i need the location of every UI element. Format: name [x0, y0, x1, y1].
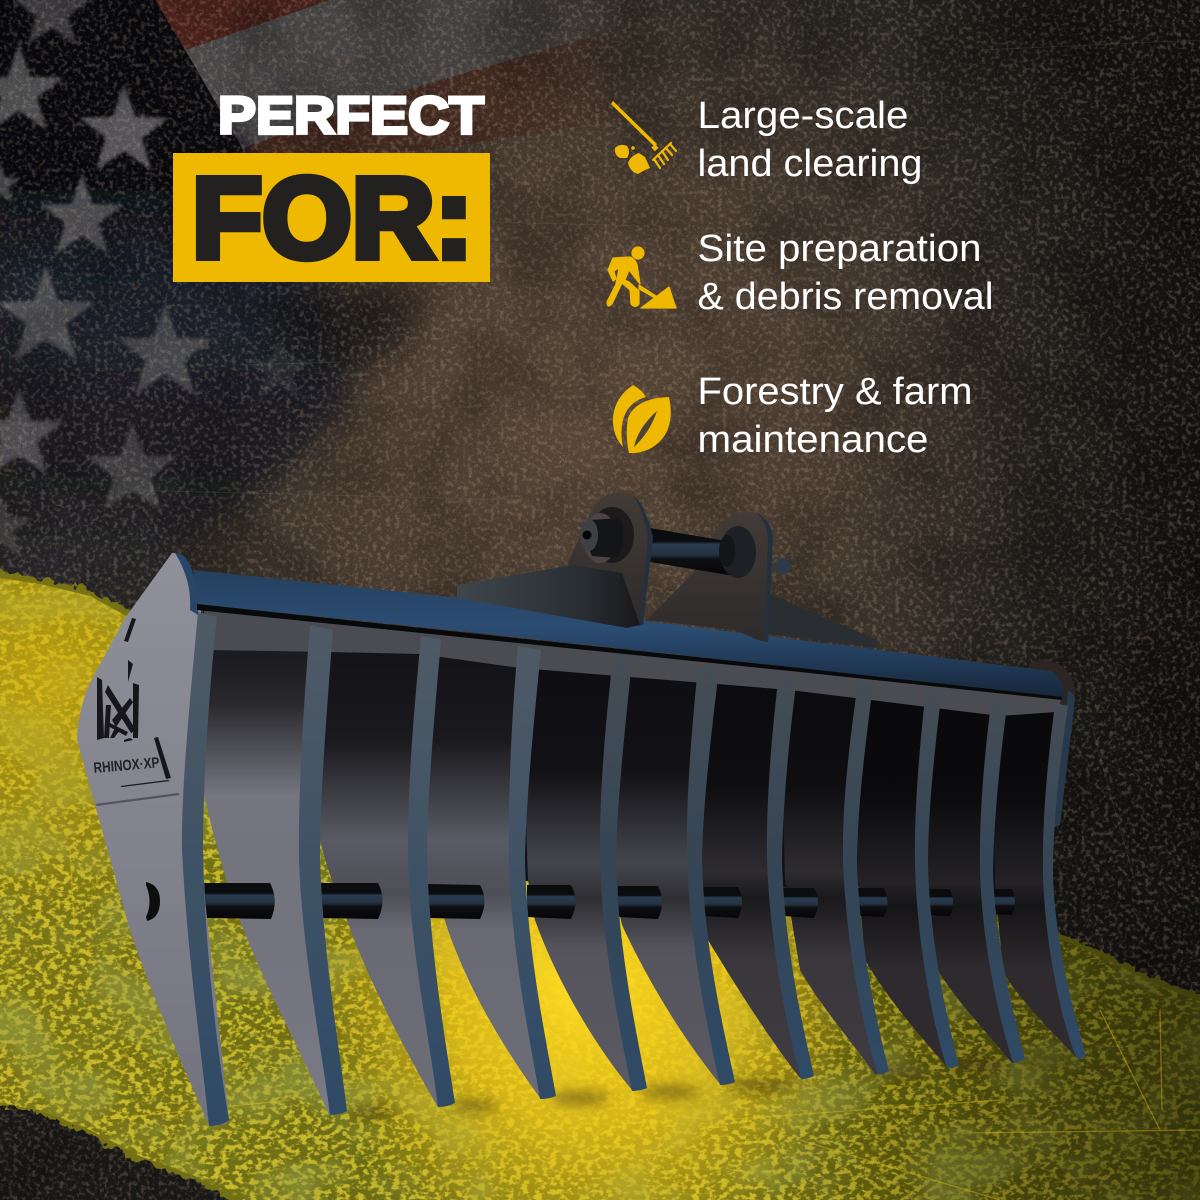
ground shadows: [350, 1057, 1076, 1118]
teeth plates: [203, 610, 1080, 1115]
heading: PERFECT: PERFECT: [218, 86, 484, 146]
text: Large-scale land clearing: land clearing: [698, 143, 922, 185]
text: Site preparation & debris removal: Site preparation: [698, 228, 982, 270]
text: Large-scale land clearing: [698, 95, 922, 185]
text: Forestry & farm maintenance: [698, 371, 972, 461]
flag stripes: [155, 0, 620, 158]
text: Forestry & farm maintenance: maintenance: [698, 419, 928, 461]
icon: worker shoveling: [607, 247, 676, 308]
heading: FOR badge: FOR:: [192, 156, 473, 282]
left ear and wedge: [567, 493, 653, 626]
rake attachment product: [77, 493, 1086, 1126]
side plate with logo: [77, 553, 229, 1125]
top beam: [193, 570, 1064, 700]
upper gray wall band: [204, 606, 1062, 716]
logo cutouts: [95, 618, 180, 806]
right end plate: [1028, 661, 1075, 828]
background: American flag: [0, 0, 620, 600]
text: Large-scale land clearing: Large-scale: [698, 95, 908, 137]
rear upper wall: [205, 610, 1058, 890]
side pin cap: [146, 882, 160, 921]
text: Forestry & farm maintenance: Forestry & farm: [698, 371, 972, 413]
flag stars: [0, 0, 312, 556]
flag canton lower soft area: [0, 130, 350, 600]
logo wordmark: RHINOX·XP: [93, 754, 160, 777]
right ear and wedge: [768, 593, 877, 648]
background: yellow brush band: [0, 568, 1200, 1200]
mounting brackets: [457, 493, 877, 648]
teeth edge strips: [182, 612, 1086, 1126]
icon: leaves: [613, 385, 671, 453]
flag canton upper sharp area: [0, 0, 262, 190]
icon: rake and rocks: [611, 101, 676, 174]
pin: [650, 528, 738, 576]
cross bar segments: [204, 883, 1015, 919]
text: Site preparation & debris removal: & debris removal: [698, 276, 994, 318]
text: Site preparation & debris removal: [698, 228, 994, 318]
